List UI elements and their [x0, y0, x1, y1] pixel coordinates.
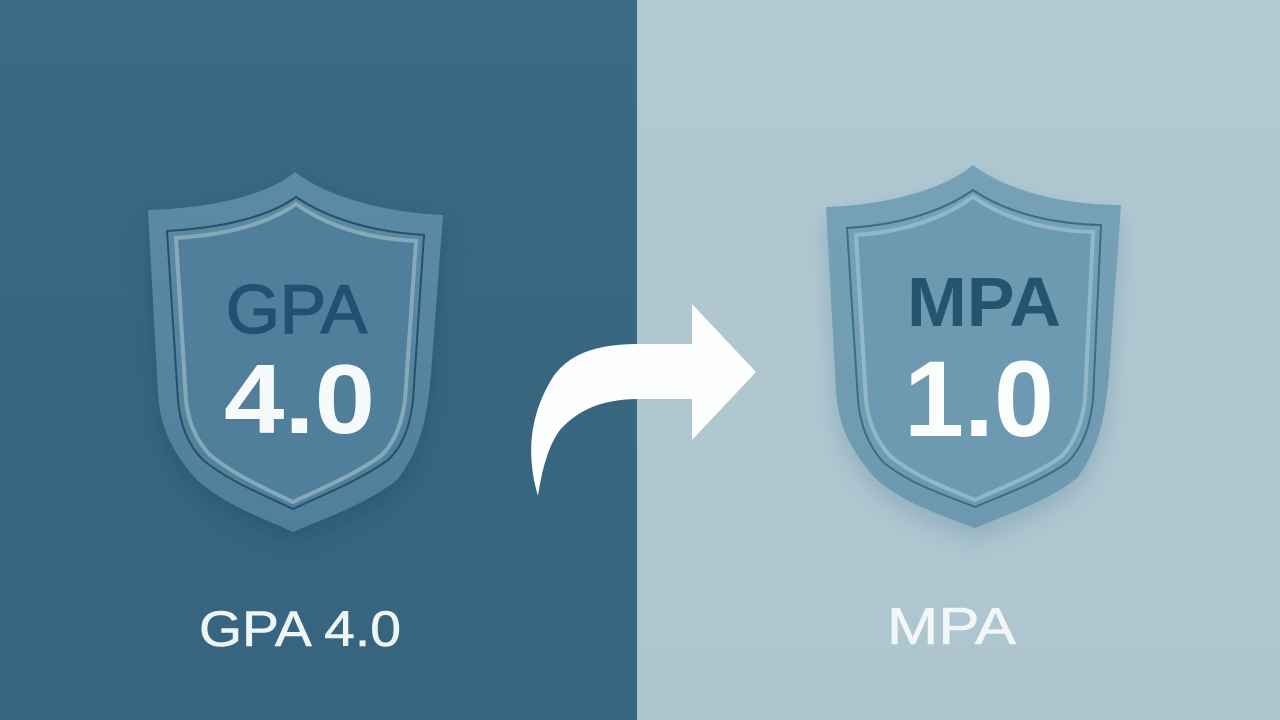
panel: left dark background — [0, 0, 637, 720]
shield: GPA 4.0 — [148, 172, 443, 542]
panel: right light background — [637, 0, 1280, 720]
shield value: 1.0: 1.0 — [904, 338, 1054, 459]
shield label: MPA: MPA — [907, 263, 1061, 341]
caption: MPA: MPA — [887, 598, 1016, 656]
shield value: 4.0: 4.0 — [224, 344, 375, 454]
arrow: curved white arrow from GPA to MPA — [531, 304, 756, 496]
caption: GPA 4.0: GPA 4.0 — [199, 601, 401, 657]
shield: MPA 1.0 — [826, 165, 1121, 538]
shield label: GPA: GPA — [226, 271, 367, 348]
